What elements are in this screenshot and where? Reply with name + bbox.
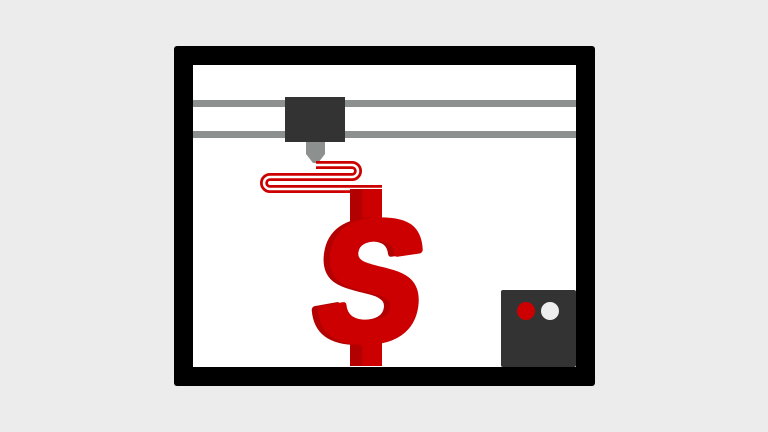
dollar sign: S (308, 185, 437, 376)
print head carriage (285, 97, 345, 142)
filament (264, 165, 382, 189)
control box (501, 290, 576, 367)
nozzle (306, 142, 325, 163)
dollar sign: S (302, 185, 431, 376)
printer frame (174, 46, 595, 386)
rails (193, 100, 576, 138)
